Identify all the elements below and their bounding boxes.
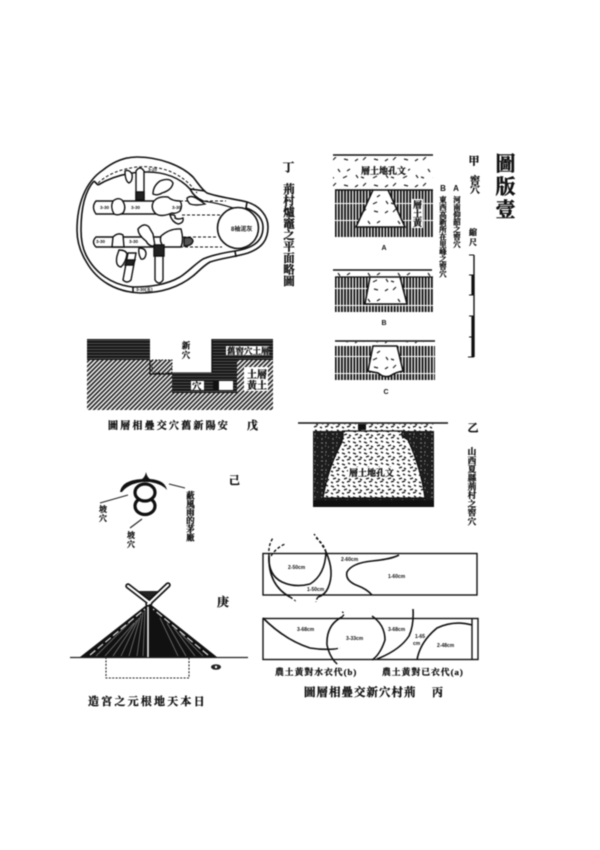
central chamber: 8袖泥灰 (231, 225, 252, 233)
panel: Jingcun overlap sections (263, 534, 478, 699)
panel caption (304, 685, 443, 699)
figure eight pits (135, 484, 155, 514)
plan labels (96, 167, 182, 292)
bell fill (323, 431, 425, 498)
label: Shanxi pit caption: 乙 (466, 422, 478, 433)
bell label: 層土地孔文 (349, 467, 394, 478)
panel: double pit plan (98, 472, 240, 549)
label: Shanxi pit caption: 山西夏縣荊村之窖穴 (466, 446, 477, 526)
leader lines (100, 484, 185, 528)
panel letter: 庚 (217, 595, 229, 609)
label: pit A and B captions: 河南仰韶之窖穴 (452, 196, 462, 249)
kiln outer and inner walls (77, 157, 268, 293)
plan labels: 3-30 (96, 239, 106, 244)
section B (333, 270, 433, 327)
dashed footprint (106, 657, 189, 678)
section C: C (383, 389, 389, 396)
lower section: 2-48cm (437, 643, 455, 649)
hatched ground (87, 360, 273, 410)
panel: plan of Jingcun kiln (77, 157, 268, 293)
dark surround (313, 431, 434, 507)
plan labels: 3-30 (172, 205, 182, 210)
eye mark (211, 664, 221, 670)
lower flue (94, 225, 193, 283)
band label: 舊窖穴土層 (227, 346, 270, 356)
dark upper layers (87, 339, 273, 374)
caption: 造宮之元根地天本日 (88, 694, 207, 708)
section A: 層土地孔文 (361, 165, 406, 176)
old pit (172, 373, 237, 393)
lower section: cm (413, 641, 421, 647)
label: pit A and B captions: 縮尺 (468, 227, 478, 248)
panel letter: 己 (229, 474, 240, 487)
new pit cut (150, 339, 212, 360)
new pit label: 新穴 (181, 340, 191, 360)
lower section (263, 609, 478, 666)
lower section: 3-68cm (297, 627, 315, 633)
label: Jingcun kiln caption: 荊村爐竈之平面略圖 (282, 182, 296, 287)
label: Anyang caption: 戊 (247, 418, 258, 432)
panel: storage pits A B C (333, 155, 435, 396)
panel: Shanxi bell pit (298, 423, 448, 507)
label: pit A and B captions: 甲 (467, 155, 479, 167)
panel caption: 丙 (432, 685, 443, 699)
plan labels: 3-30(五) (136, 287, 153, 292)
crossed poles (128, 585, 168, 604)
panel: Anyang cross-section (87, 339, 273, 410)
upper section: 2-50cm (288, 565, 306, 571)
section B: B (381, 320, 387, 327)
section A: A (381, 245, 387, 252)
ground line (70, 656, 248, 658)
panel: Japanese hut (70, 585, 248, 708)
right label: 蔽風雨的茅廠 (186, 490, 195, 542)
label: Anyang caption: 圖層相疊交穴舊新陽安 (108, 419, 230, 432)
plan labels: 3-30 (100, 205, 110, 210)
section C (335, 341, 435, 396)
label: pit A and B captions: 窖穴 (468, 174, 480, 195)
plan labels: 3-30 (129, 239, 139, 244)
upper section: 1-50cm (307, 587, 325, 593)
surface band (313, 424, 434, 431)
soil label: 土層 (247, 368, 267, 381)
sub-caption a: 農土黃對已衣代(a) (382, 666, 464, 677)
label: Jingcun kiln caption: 丁 (281, 161, 295, 173)
section A (333, 155, 433, 252)
thatched roof (80, 603, 217, 657)
scale bar (468, 255, 474, 357)
lower section: 3-68cm (388, 627, 406, 633)
plan labels: 3-20 (148, 167, 158, 172)
soil label: 黃土 (247, 379, 267, 392)
upper flue (94, 168, 205, 224)
lower section: 3-33cm (346, 636, 364, 642)
left label: 坡穴 (98, 504, 108, 523)
old pit: 穴 (192, 380, 202, 392)
roof arc (120, 472, 167, 492)
lower label: 坡穴 (126, 530, 136, 549)
upper section (263, 534, 477, 602)
section A: 層土黃 (410, 199, 422, 228)
label: pit A and B captions: 東西高新所在里峰之窖穴 (438, 196, 448, 279)
panel caption: 圖層相疊交新穴村荊 (304, 685, 416, 699)
label: pit A and B captions: B (440, 184, 446, 193)
sub-caption b: 農土黃對水衣代(b) (275, 666, 357, 677)
upper section: 2-60cm (341, 557, 359, 563)
plan labels: 3-30 (131, 205, 141, 210)
label: Jingcun kiln caption (281, 161, 296, 287)
label: Shanxi pit caption (466, 422, 478, 526)
soil label (244, 367, 268, 392)
lower section: 1-65 (415, 634, 425, 640)
label: pit A and B captions: A (453, 184, 459, 193)
dashed flue links (155, 201, 226, 247)
label: Anyang caption (108, 418, 258, 432)
heading: plate one: 圖版壹 (492, 153, 515, 222)
upper section: 1-60cm (388, 574, 406, 580)
label: pit A and B captions (438, 155, 480, 279)
central chamber (218, 208, 258, 248)
